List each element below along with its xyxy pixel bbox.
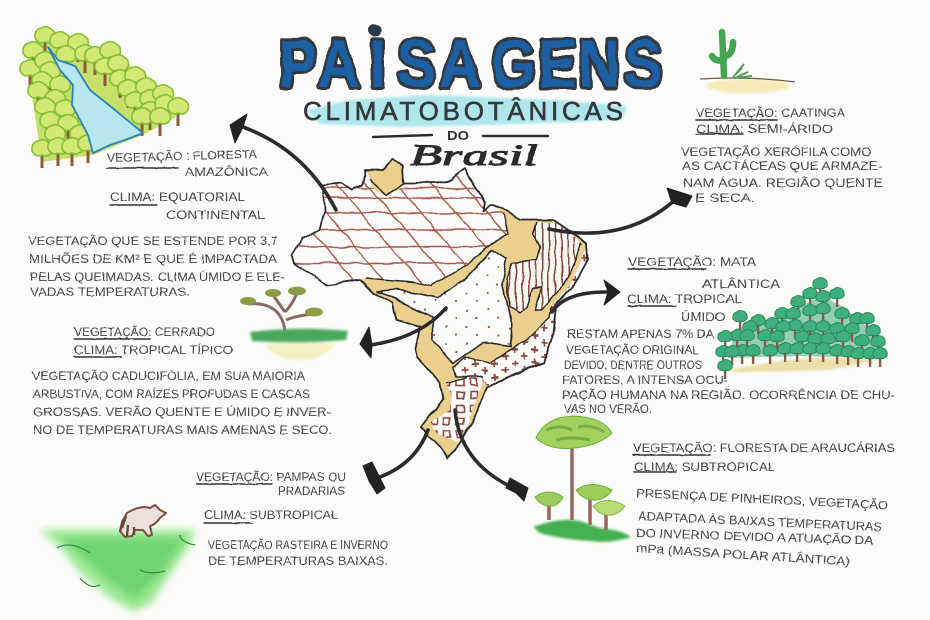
heading: Amazon vegetation and climate [107, 147, 268, 222]
body: Cerrado description [32, 368, 332, 437]
heading: Paisagens: PAISAGENS [279, 27, 662, 102]
text block: Cerrado [32, 325, 332, 437]
heading: Araucaria vegetation and climate [633, 440, 895, 474]
heading: Atlantic Forest vegetation and climate: ATLÂNTICA [702, 276, 780, 291]
body: Cerrado description: GROSSAS. VERÃO QUENTE E ÚMIDO E INVER- [33, 404, 331, 419]
map region: Amazon hatching [292, 169, 508, 285]
heading: Araucaria vegetation and climate: CLIMA: SUBTROPICAL [634, 460, 775, 474]
body: Caatinga description: NAM ÁGUA. REGIÃO QUENTE [683, 175, 883, 190]
heading: Atlantic Forest vegetation and climate: ÚMIDO [681, 309, 725, 324]
body: Cerrado description: NO DE TEMPERATURAS MAIS AMENAS E SECO. [33, 423, 332, 437]
heading: Cerrado vegetation and climate: CLIMA: TROPICAL TÍPICO [74, 342, 233, 357]
heading: Pampas vegetation and climate: PRADARIAS [278, 484, 345, 498]
illustration: Cerrado tree and grass [240, 286, 348, 360]
body: Atlantic Forest description: PAÇÃO HUMANA NA REGIÃO. OCORRÊNCIA DE CHU- [562, 387, 895, 402]
body: Caatinga description [681, 144, 883, 205]
map of Brazil with biome regions [290, 158, 589, 460]
body: Atlantic Forest description: RESTAM APENAS 7% DA [567, 327, 714, 341]
body: Araucaria description: ADAPTADA ÀS BAIXAS TEMPERATURAS [638, 508, 882, 534]
heading: Atlantic Forest vegetation and climate: VEGETAÇÃO: MATA [628, 255, 756, 269]
subtitle: Brasil script: Brasil [410, 139, 538, 172]
arrow: to Pampas [363, 430, 428, 494]
heading: Cerrado vegetation and climate [74, 325, 233, 357]
text block: Caatinga [681, 106, 883, 205]
body: Amazon description: VADAS TEMPERATURAS. [30, 285, 190, 299]
body: Araucaria description [636, 486, 888, 568]
arrow: to Amazon [230, 114, 336, 210]
heading: Caatinga vegetation and climate: CLIMA: SEMI-ÁRIDO [696, 121, 833, 136]
text block: Amazon forest [28, 147, 285, 299]
map: country outline [292, 158, 588, 458]
arrow: to Caatinga [549, 188, 692, 233]
body: Atlantic Forest description: FATORES, A INTENSA OCU- [562, 373, 728, 387]
body: Amazon description: MILHÕES DE KM² E QUE É IMPACTADA [29, 251, 277, 266]
arrow: to Atlantic Forest [552, 280, 620, 312]
body: Atlantic Forest description: VAS NO VERÃO. [564, 402, 652, 416]
body: Amazon description [28, 234, 285, 299]
subtitle: Climatobotânicas with cyan highlight: CLIMATOBOTÂNICAS [303, 96, 623, 126]
map: tan base, Pantanal and transition zones [292, 158, 588, 458]
body: Atlantic Forest description [562, 327, 895, 416]
map region: Caatinga stripes [507, 222, 582, 313]
illustration: Caatinga cactus [700, 32, 795, 93]
heading: Pampas vegetation and climate: CLIMA: SUBTROPICAL [204, 508, 338, 522]
body: Atlantic Forest description: VEGETAÇÃO ORIGINAL [566, 343, 699, 357]
body: Amazon description: PELAS QUEIMADAS. CLIMA ÚMIDO E ELE- [30, 269, 285, 284]
body: Pampas description [208, 538, 388, 568]
text block: Pampas [196, 470, 388, 568]
heading: Pampas vegetation and climate: VEGETAÇÃO: PAMPAS OU [196, 470, 346, 484]
body: Pampas description: DE TEMPERATURAS BAIXAS. [208, 554, 388, 568]
heading: Amazon vegetation and climate: AMAZÔNICA [185, 164, 268, 179]
illustration: Amazon forest and river [20, 27, 188, 168]
illustration: Araucaria trees [533, 416, 631, 542]
body: Caatinga description: E SECA. [695, 191, 755, 205]
icon: animal [120, 505, 166, 537]
body: Araucaria description: PRESENÇA DE PINHEIROS, VEGETAÇÃO [636, 486, 888, 512]
heading: Amazon vegetation and climate: CONTINENTAL [166, 208, 265, 222]
title: Paisagens Climatobotânicas do Brasil [279, 26, 662, 172]
text block: Araucaria forest [633, 440, 895, 568]
map region: Araucaria squares [430, 375, 483, 443]
body: Cerrado description: VEGETAÇÃO CADUCIFÓLIA, EM SUA MAIORIA [32, 368, 305, 383]
body: Araucaria description: DO INVERNO DEVIDO A ATUAÇÃO DA [636, 526, 873, 547]
heading: Cerrado vegetation and climate: VEGETAÇÃO: CERRADO [74, 325, 215, 339]
map: inner biome borders [365, 178, 582, 383]
body: Araucaria description: mPa (MASSA POLAR ATLÂNTICA) [636, 540, 850, 568]
map region: Cerrado dots [377, 252, 511, 363]
heading: Atlantic Forest vegetation and climate [627, 255, 780, 324]
heading: Pampas vegetation and climate [196, 470, 346, 523]
heading: Araucaria vegetation and climate: VEGETAÇÃO: FLORESTA DE ARAUCÁRIAS [633, 440, 895, 455]
heading: Caatinga vegetation and climate [696, 106, 845, 136]
body: Amazon description: VEGETAÇÃO QUE SE ESTENDE POR 3,7 [28, 234, 278, 248]
subtitle: do: DO [447, 128, 469, 143]
body: Pampas description: VEGETAÇÃO RASTEIRA E INVERNO [208, 538, 388, 552]
body: Caatinga description: AS CACTÁCEAS QUE ARMAZE- [682, 158, 882, 173]
arrow: to Cerrado [360, 308, 446, 358]
heading: Atlantic Forest vegetation and climate: CLIMA: TROPICAL [627, 292, 742, 306]
heading: Amazon vegetation and climate: VEGETAÇÃO : FLORESTA [107, 147, 257, 165]
heading: Amazon vegetation and climate: CLIMA: EQUATORIAL [110, 190, 245, 204]
body: Cerrado description: ARBUSTIVA, COM RAÍZES PROFUDAS E CASCAS [33, 386, 310, 401]
map region: Atlantic Forest crosses [453, 247, 588, 387]
arrow: to Araucaria forest [455, 410, 528, 501]
text block: Atlantic Forest [562, 255, 895, 416]
illustration: Pampas grassland and animal [40, 505, 195, 611]
body: Atlantic Forest description: DEVIDO, DENTRE OUTROS [564, 358, 702, 372]
heading: Caatinga vegetation and climate: VEGETAÇÃO: CAATINGA [696, 106, 845, 120]
body: Caatinga description: VEGETAÇÃO XERÓFILA COMO [681, 144, 871, 159]
illustration: Atlantic Forest trees [716, 278, 887, 379]
